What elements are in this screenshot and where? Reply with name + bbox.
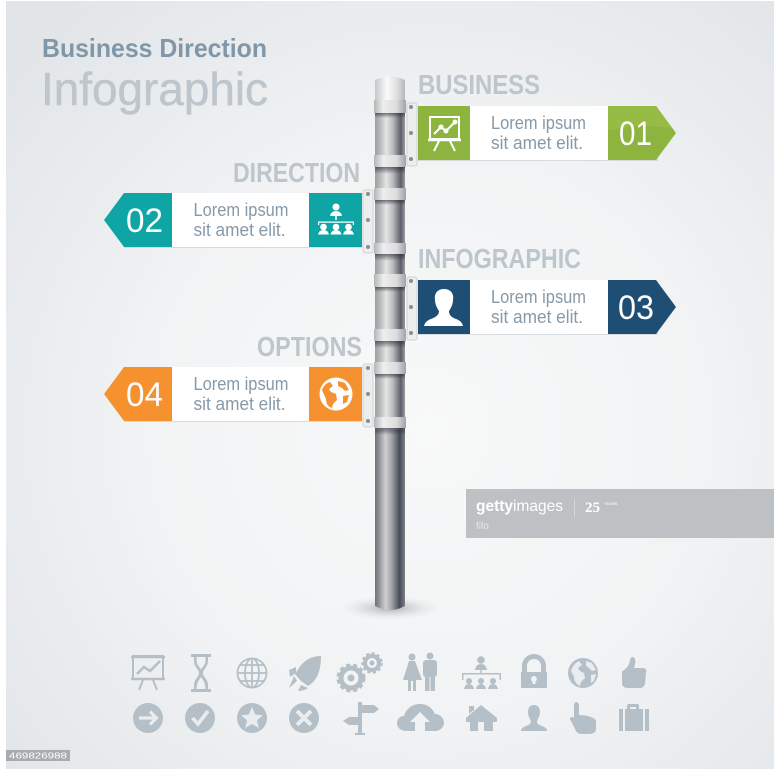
sign 2: direction: [104, 157, 406, 254]
icon: presentation board: [428, 117, 461, 151]
icon: check circle: [185, 703, 215, 733]
image id tag: 469826988: [9, 750, 67, 760]
arrow panel 1: [418, 106, 676, 161]
clamp 2: [363, 188, 406, 254]
number 04: 04: [126, 376, 163, 414]
text 4: sit amet elit.: [194, 394, 286, 414]
heading: direction: DIRECTION: [233, 157, 360, 188]
icon: couple: [403, 652, 437, 691]
sign 3: infographic: [374, 243, 676, 341]
sign 1: business: [374, 69, 676, 167]
icon: gears: [338, 654, 382, 691]
icon: signpost: [343, 702, 379, 735]
icon: pointing hand: [570, 702, 596, 734]
title: [41, 33, 268, 115]
arrow panel 2: [104, 193, 362, 248]
clamp 1: [374, 100, 417, 167]
signpost pole: [340, 76, 440, 620]
text 2: [194, 200, 288, 240]
icon: arrow circle: [133, 703, 163, 733]
icon: earth: [568, 658, 598, 688]
text 1: sit amet elit.: [491, 133, 583, 153]
icon: cloud upload: [397, 704, 444, 731]
text 1: Lorem ipsum: [491, 113, 586, 133]
title: Infographic: [41, 63, 268, 115]
icon: briefcase: [619, 704, 649, 731]
watermark: filo: [476, 521, 489, 532]
icon: thumb up: [622, 657, 646, 688]
icon: globe: [320, 378, 352, 410]
clamp 4: [363, 362, 406, 428]
icon: lock: [521, 654, 547, 688]
text 4: [194, 374, 288, 414]
arrow panel 4: [104, 367, 362, 422]
heading: infographic: INFOGRAPHIC: [418, 243, 581, 274]
icon: cross circle: [289, 703, 319, 733]
text 2: Lorem ipsum: [194, 200, 288, 220]
icon: wire globe: [238, 658, 267, 688]
text 4: Lorem ipsum: [194, 374, 288, 394]
image id tag: [6, 750, 70, 761]
clamp 3: [374, 274, 417, 341]
text 3: Lorem ipsum: [491, 287, 586, 307]
icon: house: [466, 705, 497, 731]
text 3: sit amet elit.: [491, 307, 583, 327]
watermark: [466, 489, 774, 538]
heading: business: BUSINESS: [418, 69, 540, 100]
icon: hourglass: [191, 654, 211, 692]
text 1: [491, 113, 586, 153]
icon: org chart: [318, 204, 354, 234]
text 2: sit amet elit.: [194, 220, 286, 240]
icon: rocket: [289, 656, 321, 691]
number 02: 02: [126, 202, 163, 240]
icon: presentation: [131, 656, 165, 690]
watermark: YEARS: [604, 501, 618, 506]
watermark: 25: [585, 500, 600, 516]
heading: options: OPTIONS: [257, 331, 362, 362]
icon: person: [521, 705, 547, 731]
text 3: [491, 287, 586, 327]
arrow panel 3: [418, 280, 676, 335]
icon row 2: [133, 702, 649, 735]
watermark: gettyimages: [476, 498, 563, 515]
icon row 1: [131, 652, 646, 692]
icon: star circle: [237, 703, 267, 733]
icon: person: [424, 289, 463, 326]
number 01: 01: [619, 115, 652, 153]
icon: org chart small: [462, 656, 501, 689]
number 03: 03: [618, 289, 654, 327]
title: Business Direction: [42, 33, 267, 63]
sign 4: options: [104, 331, 406, 428]
